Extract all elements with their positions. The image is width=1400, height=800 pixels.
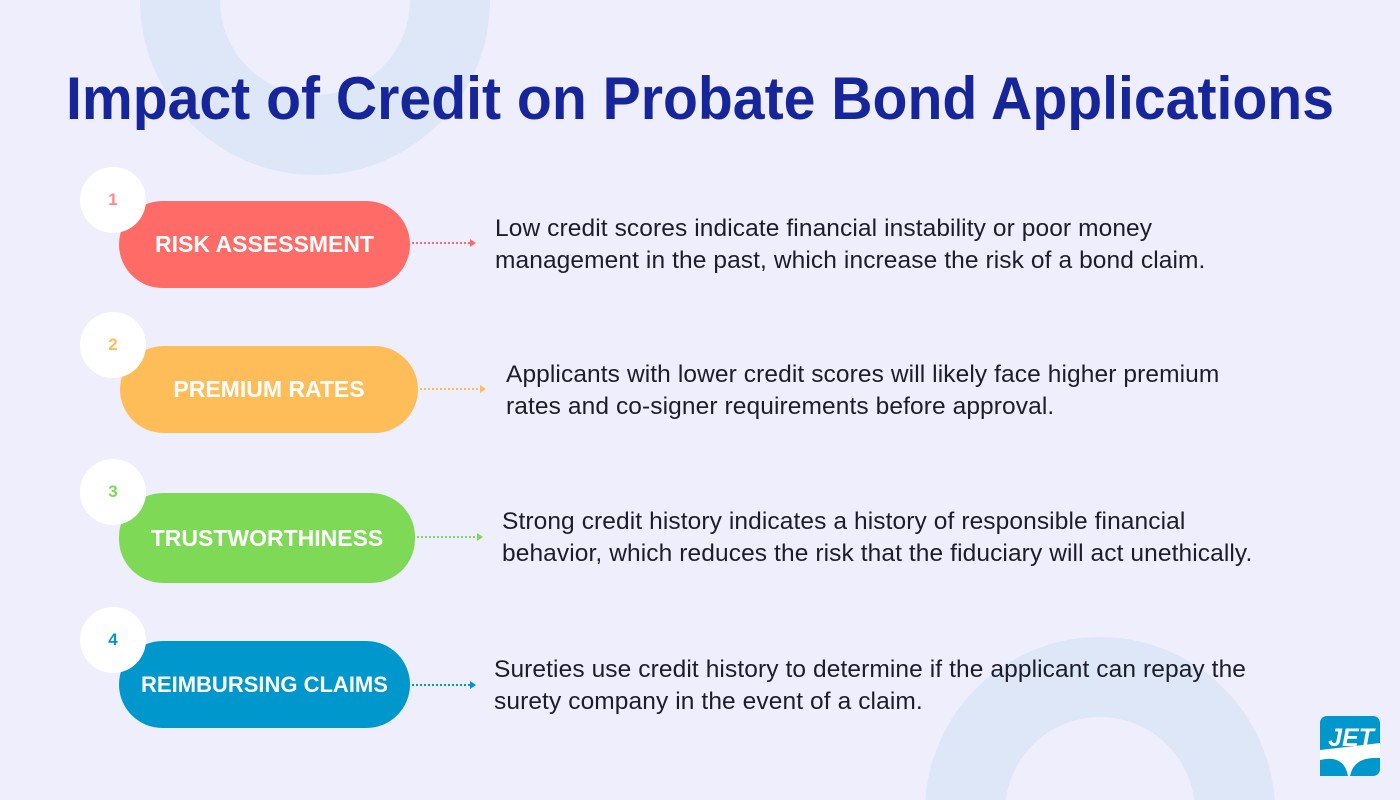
pill: risk assessment: [119, 201, 410, 288]
number 2: 2: [108, 335, 118, 354]
row 2: premium rates: [80, 312, 1219, 433]
number 2: [80, 312, 146, 378]
text 2: [506, 361, 1219, 420]
text 4: surety company in the event of a claim.: [494, 688, 923, 715]
pill: premium rates: [120, 346, 418, 433]
row 4: reimbursing claims: [80, 607, 1246, 728]
logo: JET: JET: [1328, 724, 1377, 752]
pill: risk assessment: RISK ASSESSMENT: [155, 231, 374, 257]
text 4: Sureties use credit history to determine if the applicant can repay the: [494, 656, 1246, 683]
text 3: behavior, which reduces the risk that the fiduciary will act unethically.: [502, 540, 1252, 567]
number 3: [80, 459, 146, 525]
number 1: [80, 167, 146, 233]
number 4: 4: [108, 630, 118, 649]
arrow 1: [412, 239, 476, 247]
row 3: trustworthiness: [80, 459, 1252, 583]
row 1: risk assessment: [80, 167, 1205, 288]
number 1: 1: [108, 190, 118, 209]
text 2: Applicants with lower credit scores will likely face higher premium: [506, 361, 1219, 388]
arrow 4: [412, 681, 476, 689]
text 4: [494, 656, 1246, 715]
text 1: [495, 215, 1205, 274]
text 1: Low credit scores indicate financial instability or poor money: [495, 215, 1152, 242]
pill: trustworthiness: [119, 493, 415, 583]
number 3: 3: [108, 482, 118, 501]
arrow 2: [420, 385, 486, 393]
pill: premium rates: PREMIUM RATES: [173, 376, 365, 402]
text 3: [502, 508, 1252, 567]
pill: trustworthiness: TRUSTWORTHINESS: [151, 524, 383, 550]
arrow 3: [417, 533, 483, 541]
pill: reimbursing claims: REIMBURSING CLAIMS: [141, 672, 388, 696]
title: Impact of Credit on Probate Bond Applications: [66, 65, 1334, 130]
pill: reimbursing claims: [119, 641, 410, 728]
text 1: management in the past, which increase the risk of a bond claim.: [495, 247, 1205, 274]
text 3: Strong credit history indicates a history of responsible financial: [502, 508, 1185, 535]
text 2: rates and co-signer requirements before approval.: [506, 393, 1054, 420]
logo: JET: [1320, 716, 1380, 776]
number 4: [80, 607, 146, 673]
